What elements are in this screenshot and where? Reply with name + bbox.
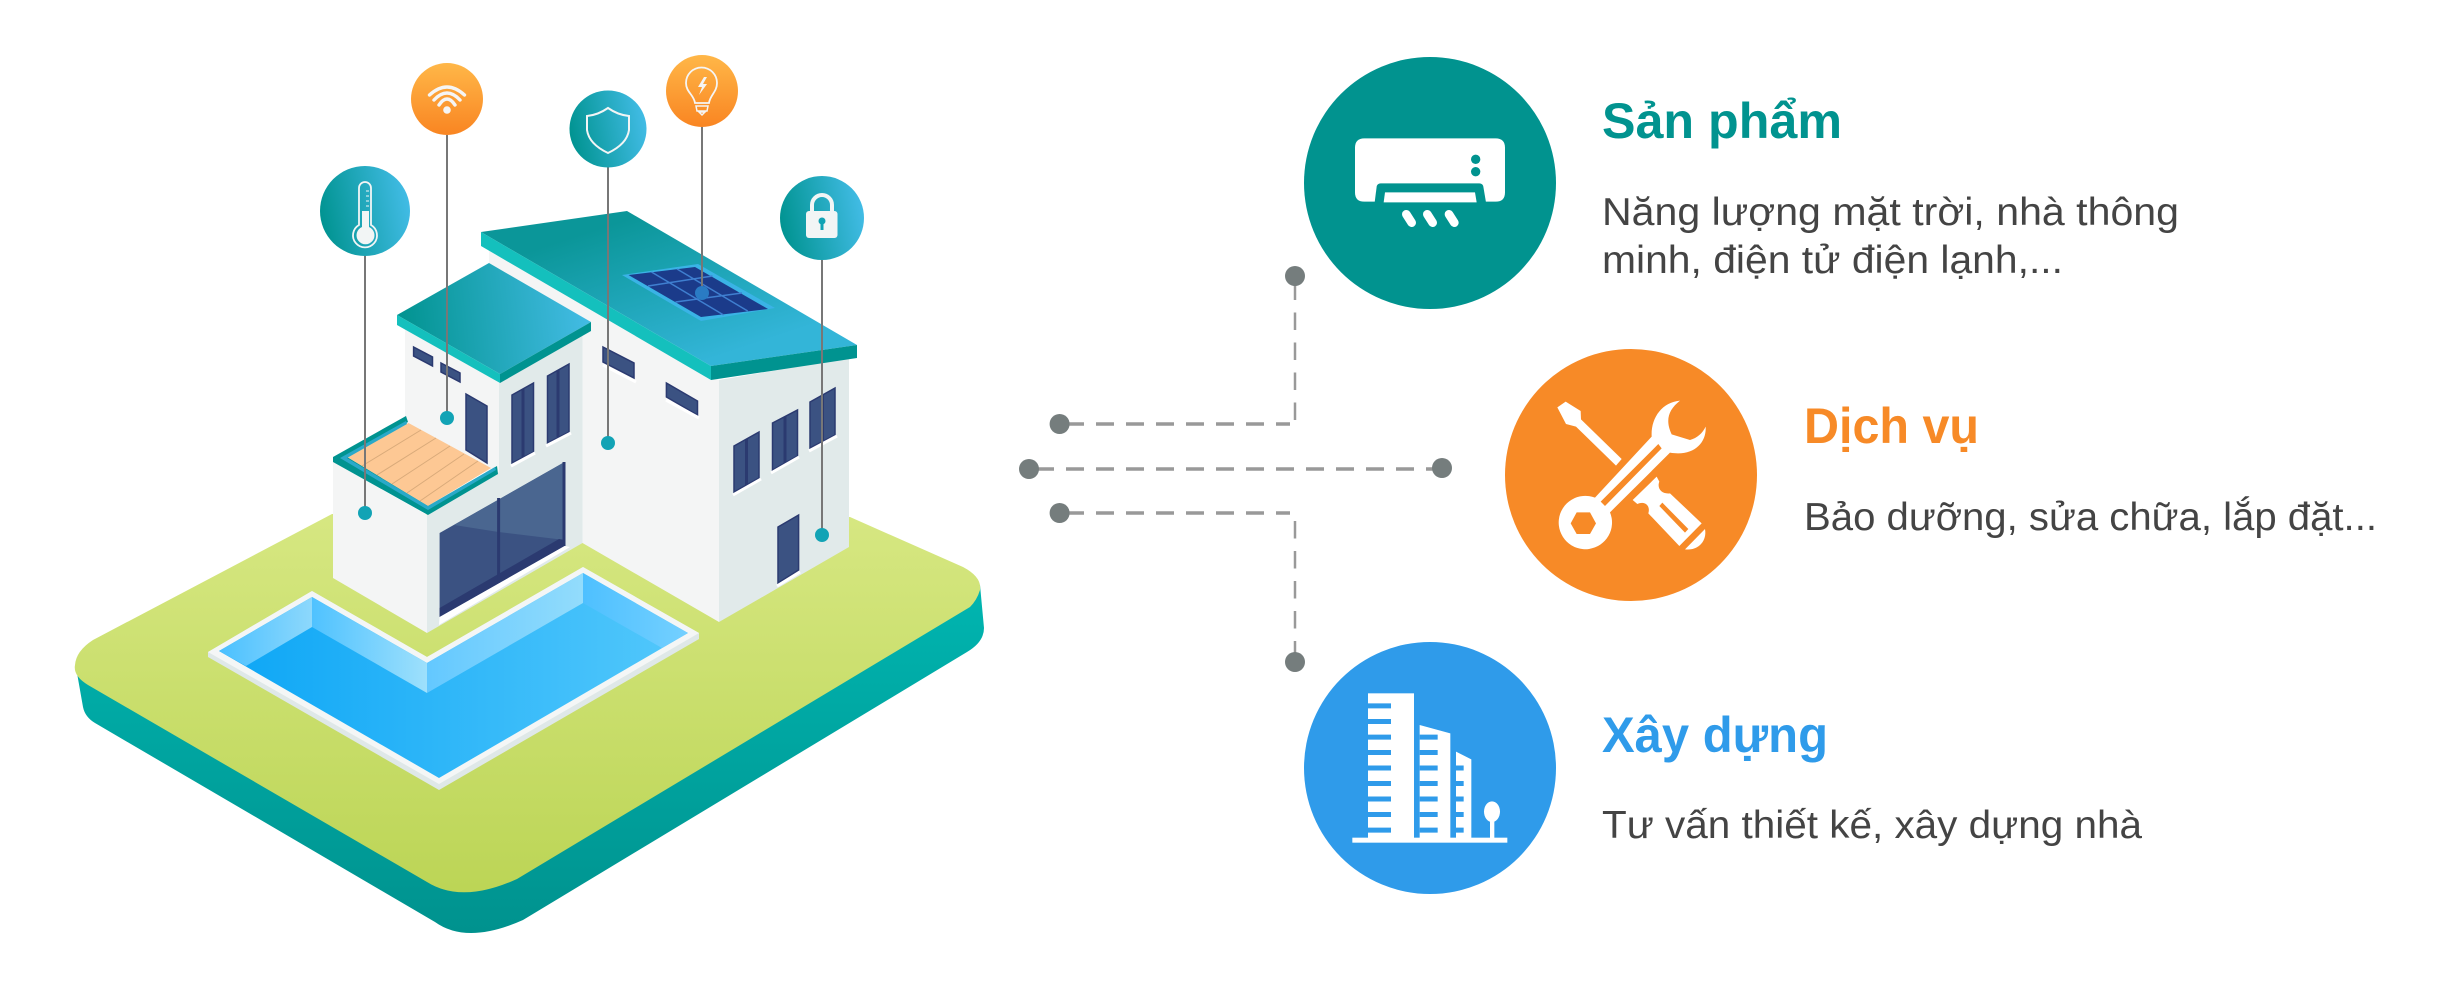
description: products: Năng lượng mặt trời, nhà thông bbox=[1602, 191, 2179, 234]
icon: thermometer bbox=[320, 166, 410, 256]
icon: light bulb bbox=[666, 55, 738, 127]
upper roof bbox=[397, 263, 591, 383]
description: products bbox=[1602, 191, 2179, 282]
main roof bbox=[481, 211, 857, 380]
windows bbox=[414, 347, 837, 586]
icon: padlock bbox=[780, 176, 864, 260]
description: products: minh, điện tử điện lạnh,... bbox=[1602, 239, 2063, 282]
icon: shield bbox=[570, 90, 646, 168]
icon: air conditioner bbox=[1304, 57, 1556, 309]
panel: construction bbox=[1304, 642, 2142, 894]
panel: services bbox=[1505, 349, 2377, 601]
heading: construction: Xây dựng bbox=[1602, 707, 1828, 763]
house bbox=[333, 211, 857, 633]
icon: wrench and screwdriver bbox=[1505, 349, 1757, 601]
connector pins bbox=[358, 127, 829, 542]
house walls bbox=[333, 246, 849, 633]
swimming pool bbox=[208, 567, 699, 790]
icon: wifi bbox=[411, 63, 483, 135]
ground platform bbox=[75, 514, 984, 933]
heading: services: Dịch vụ bbox=[1804, 398, 1979, 454]
solar panel bbox=[622, 264, 775, 321]
heading: products: Sản phẩm bbox=[1602, 93, 1842, 149]
dashed connectors bbox=[1019, 266, 1452, 672]
panel: products bbox=[1304, 57, 2179, 309]
sliding glass door bbox=[439, 462, 570, 625]
icon: buildings bbox=[1304, 642, 1556, 894]
balcony bbox=[333, 416, 498, 515]
description: services: Bảo dưỡng, sửa chữa, lắp đặt... bbox=[1804, 496, 2377, 539]
description: construction: Tư vấn thiết kế, xây dựng nhà bbox=[1602, 804, 2142, 847]
